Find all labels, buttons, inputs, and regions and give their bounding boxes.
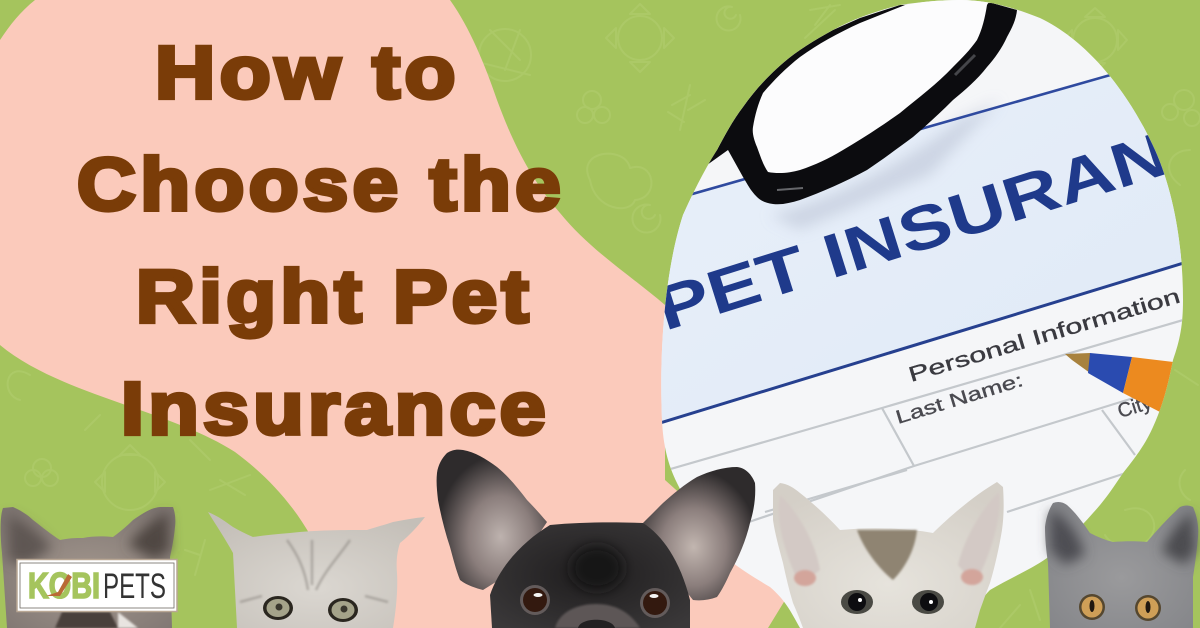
glasses <box>700 0 1017 204</box>
pink blob <box>0 0 790 628</box>
title line 2: Choose the <box>77 143 565 226</box>
cat 1: grey brown cat <box>1 507 175 628</box>
heading: PET INSURAN: PET INSURAN <box>649 119 1177 344</box>
cat 4 eyes <box>1079 594 1161 621</box>
title <box>77 31 565 450</box>
form paper <box>650 0 1200 628</box>
top blue rule <box>692 74 1110 196</box>
logo: KobiPets <box>17 560 177 612</box>
form label: Personal Information: Personal Information <box>906 285 1183 387</box>
dog eyes <box>520 585 670 618</box>
french bulldog <box>437 450 755 628</box>
cat 2 eyes <box>263 596 358 622</box>
lower blue rule <box>650 258 1200 426</box>
logo wordmark: KOBI <box>28 565 100 606</box>
title line 3: Right Pet <box>136 255 533 338</box>
logo pet mark <box>46 574 72 596</box>
logo pets wordmark: PETS <box>103 567 166 606</box>
cat 3 eyes <box>841 590 944 614</box>
form header band <box>661 75 1182 421</box>
dog head <box>490 522 690 628</box>
title line 1: How to <box>155 31 460 114</box>
cat 3: white and tan kitten <box>773 482 1004 628</box>
form field lines <box>660 318 1190 525</box>
title line 4: Insurance <box>121 367 550 450</box>
form label: City: City <box>1115 392 1154 423</box>
form label: Last Name: Last Name: <box>893 370 1026 429</box>
cat 2: silver tabby cat <box>208 512 425 628</box>
right ear <box>643 467 755 600</box>
left ear <box>437 450 547 590</box>
glasses shadow <box>770 100 1000 230</box>
photo blob: pet insurance form <box>649 0 1200 628</box>
pen <box>1065 353 1172 412</box>
cat 4: grey kitten <box>1045 502 1198 628</box>
